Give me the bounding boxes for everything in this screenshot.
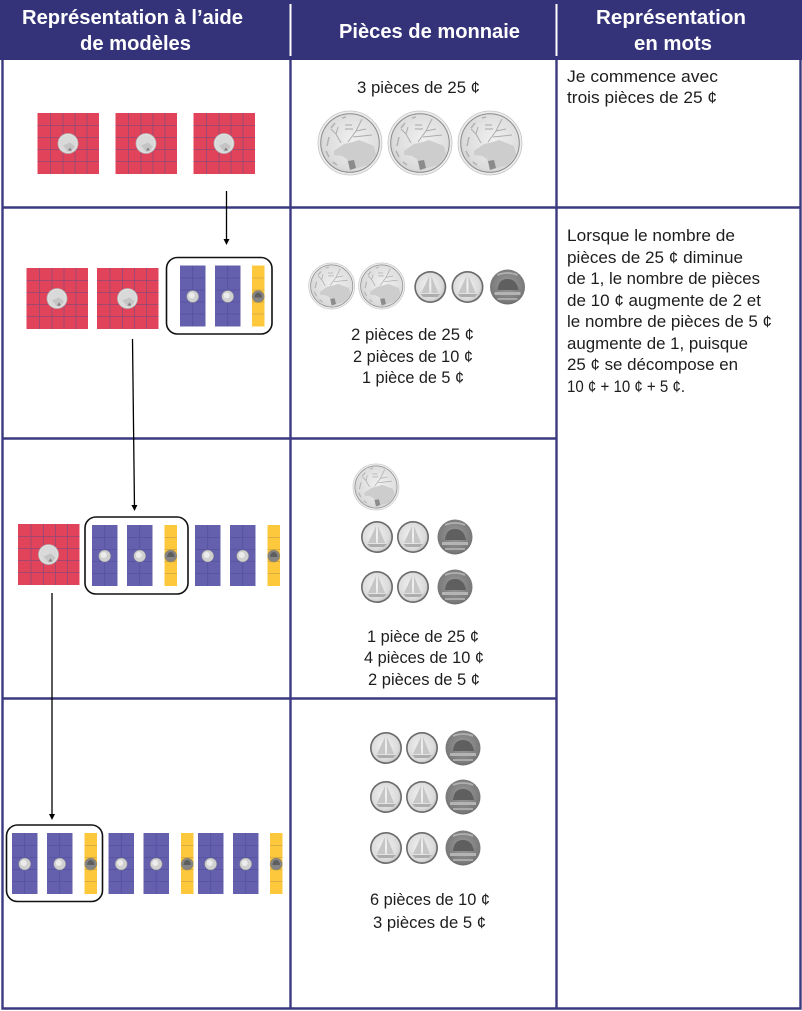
text: words row 2 [567, 227, 772, 396]
text: words row 2: le nombre de pièces de 5 ¢ [567, 313, 772, 331]
text: words row 2: de 10 ¢ augmente de 2 et [567, 292, 761, 310]
row 3 coins label: 4 pièces de 10 ¢ [364, 649, 484, 667]
row 4 coins label [370, 891, 490, 932]
row 4 coins [370, 730, 480, 866]
text: words row 2: augmente de 1, puisque [567, 335, 748, 353]
heading: coins column: Pièces de monnaie [339, 20, 520, 43]
heading: models column [22, 6, 243, 55]
heading: words column: Représentation [596, 6, 746, 29]
heading: models column: Représentation à l’aide [22, 6, 243, 29]
row 1 models: three quarter blocks [38, 113, 255, 174]
heading: words column [596, 6, 746, 55]
text: words row 2: Lorsque le nombre de [567, 227, 735, 245]
callout: decomposed quarter [6, 825, 102, 902]
row 2 coins label: 2 pièces de 10 ¢ [353, 348, 473, 366]
row 3 models [18, 517, 280, 594]
row 2 coins label: 1 pièce de 5 ¢ [362, 369, 464, 387]
callout: decomposed quarter [85, 517, 188, 594]
heading: models column: de modèles [80, 32, 191, 55]
row 3 coins label: 1 pièce de 25 ¢ [367, 628, 479, 646]
text: words row 2: pièces de 25 ¢ diminue [567, 249, 743, 267]
row 3 coins [353, 464, 472, 604]
row 4 coins label: 3 pièces de 5 ¢ [373, 914, 486, 932]
text: words row 2: 10 ¢ + 10 ¢ + 5 ¢. [567, 378, 685, 396]
text: words row 1: Je commence avec [567, 68, 718, 86]
row 2 coins [309, 263, 525, 309]
row 3 coins label [364, 628, 484, 689]
arrow: row 3 to row 4 [51, 593, 53, 818]
row 2 coins label [351, 326, 474, 387]
row 4 models [6, 825, 282, 902]
row 4 coins label: 6 pièces de 10 ¢ [370, 891, 490, 909]
text: words row 1 [567, 68, 718, 107]
heading: words column: en mots [634, 32, 712, 55]
arrow: row 2 to row 3 [132, 339, 134, 509]
row 2 coins label: 2 pièces de 25 ¢ [351, 326, 474, 344]
row 1 coins: three quarters [318, 111, 522, 175]
callout: decomposed quarter [166, 258, 272, 334]
row 3 coins label: 2 pièces de 5 ¢ [368, 671, 480, 689]
text: words row 2: 25 ¢ se décompose en [567, 356, 738, 374]
row 1 coins label: 3 pièces de 25 ¢ [357, 79, 480, 97]
header bar [0, 0, 802, 60]
text: words row 1: trois pièces de 25 ¢ [567, 89, 717, 107]
row 2 models [26, 258, 272, 334]
text: words row 2: de 1, le nombre de pièces [567, 270, 760, 288]
arrow: row 1 to row 2 [226, 191, 228, 243]
